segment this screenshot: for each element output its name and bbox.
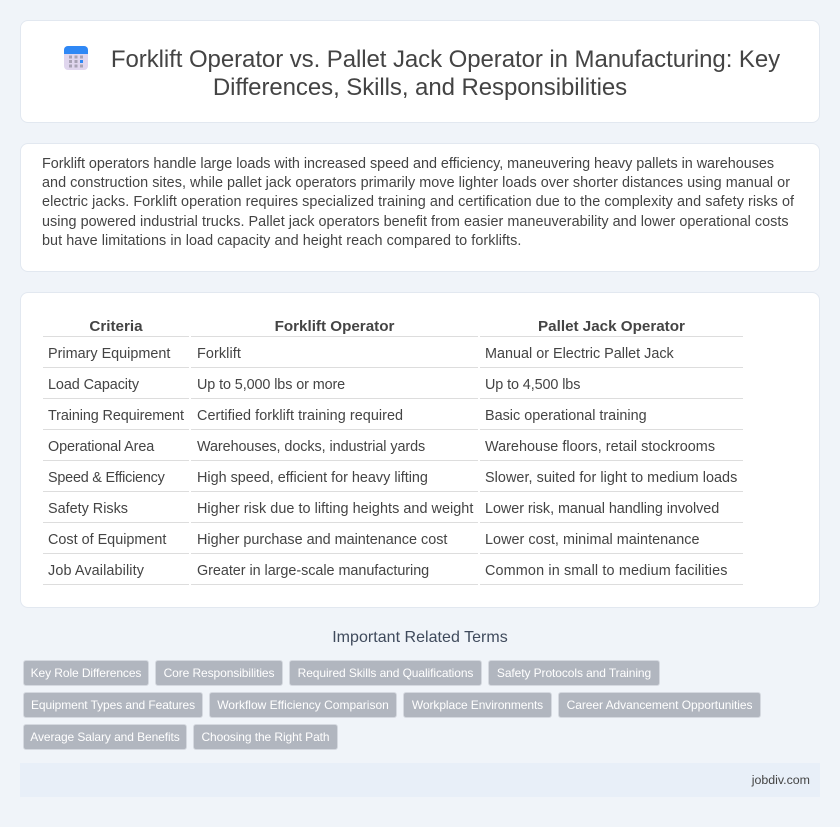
row: cost of equipment: Cost of Equipment bbox=[48, 532, 166, 548]
tag bbox=[488, 660, 660, 686]
heading: important related terms: Important Related Terms bbox=[332, 629, 508, 646]
row: training requirement: Basic operational training bbox=[485, 408, 647, 424]
row: speed and efficiency: Slower, suited for light to medium loads bbox=[485, 470, 737, 486]
row: cost of equipment: Lower cost, minimal maintenance bbox=[485, 532, 700, 548]
icon: calendar bbox=[64, 46, 88, 70]
tag bbox=[23, 724, 187, 750]
row: training requirement: Training Requirement bbox=[48, 408, 184, 424]
tag bbox=[193, 724, 338, 750]
tag: Key Role Differences bbox=[31, 666, 141, 680]
tag bbox=[23, 660, 149, 686]
intro text: using powered industrial trucks. Pallet jack operators benefit from easier maneuverability and lower operational costs bbox=[42, 214, 789, 230]
tag: Choosing the Right Path bbox=[201, 730, 330, 744]
footer bar bbox=[20, 763, 820, 797]
tag: Core Responsibilities bbox=[164, 666, 274, 680]
row: speed and efficiency: High speed, efficient for heavy lifting bbox=[197, 470, 428, 486]
row: speed and efficiency bbox=[43, 470, 743, 492]
row: cost of equipment: Higher purchase and maintenance cost bbox=[197, 532, 447, 548]
row: job availability: Greater in large-scale manufacturing bbox=[197, 563, 429, 579]
row: load capacity: Load Capacity bbox=[48, 377, 139, 393]
column headers bbox=[43, 318, 743, 337]
intro text: Forklift operators handle large loads with increased speed and efficiency, maneuvering heavy pallets in warehouses bbox=[42, 156, 774, 172]
tag bbox=[403, 692, 552, 718]
row: primary equipment bbox=[43, 346, 743, 368]
row: cost of equipment bbox=[43, 532, 743, 554]
tag: Workplace Environments bbox=[412, 698, 543, 712]
row: safety risks bbox=[43, 501, 743, 523]
title: Forklift Operator vs. Pallet Jack Operator in Manufacturing: Key bbox=[111, 46, 780, 73]
panel: intro bbox=[20, 143, 820, 272]
row: load capacity: Up to 4,500 lbs bbox=[485, 377, 580, 393]
intro text: and construction sites, while pallet jack operators primarily move lighter loads over shorter distances using manual or bbox=[42, 175, 790, 191]
column headers: Pallet Jack Operator bbox=[538, 318, 685, 335]
tag bbox=[289, 660, 482, 686]
row: operational area: Warehouse floors, retail stockrooms bbox=[485, 439, 715, 455]
footer credit: jobdiv.com bbox=[752, 773, 810, 787]
row: job availability: Common in small to medium facilities bbox=[485, 563, 728, 579]
title: Differences, Skills, and Responsibilities bbox=[213, 74, 627, 101]
tag: Average Salary and Benefits bbox=[30, 730, 180, 744]
row: training requirement: Certified forklift training required bbox=[197, 408, 403, 424]
intro text bbox=[42, 156, 794, 249]
tag: Required Skills and Qualifications bbox=[298, 666, 473, 680]
intro text: electric jacks. Forklift operation requires specialized training and certification due to the complexity and safety risks of bbox=[42, 194, 794, 210]
panel: header bbox=[20, 20, 820, 123]
row: operational area: Operational Area bbox=[48, 439, 154, 455]
row: primary equipment: Manual or Electric Pallet Jack bbox=[485, 346, 674, 362]
title bbox=[111, 46, 780, 101]
tag: Workflow Efficiency Comparison bbox=[217, 698, 389, 712]
row: job availability: Job Availability bbox=[48, 563, 144, 579]
tag: Equipment Types and Features bbox=[31, 698, 195, 712]
tag bbox=[209, 692, 397, 718]
column headers: Forklift Operator bbox=[275, 318, 394, 335]
tag bbox=[155, 660, 283, 686]
tag: Safety Protocols and Training bbox=[497, 666, 651, 680]
tag bbox=[23, 692, 203, 718]
tag: Career Advancement Opportunities bbox=[567, 698, 752, 712]
row: job availability bbox=[43, 563, 743, 585]
row: safety risks: Higher risk due to lifting heights and weight bbox=[197, 501, 473, 517]
row: load capacity bbox=[43, 377, 743, 399]
column headers: Criteria bbox=[89, 318, 143, 335]
panel: comparison table bbox=[20, 292, 820, 608]
row: operational area bbox=[43, 439, 743, 461]
row: speed and efficiency: Speed & Efficiency bbox=[48, 470, 165, 486]
row: training requirement bbox=[43, 408, 743, 430]
row: safety risks: Lower risk, manual handling involved bbox=[485, 501, 719, 517]
row: safety risks: Safety Risks bbox=[48, 501, 128, 517]
row: load capacity: Up to 5,000 lbs or more bbox=[197, 377, 345, 393]
tag bbox=[558, 692, 761, 718]
row: primary equipment: Forklift bbox=[197, 346, 241, 362]
intro text: but have limitations in load capacity and height reach compared to forklifts. bbox=[42, 233, 521, 249]
row: primary equipment: Primary Equipment bbox=[48, 346, 170, 362]
row: operational area: Warehouses, docks, industrial yards bbox=[197, 439, 425, 455]
